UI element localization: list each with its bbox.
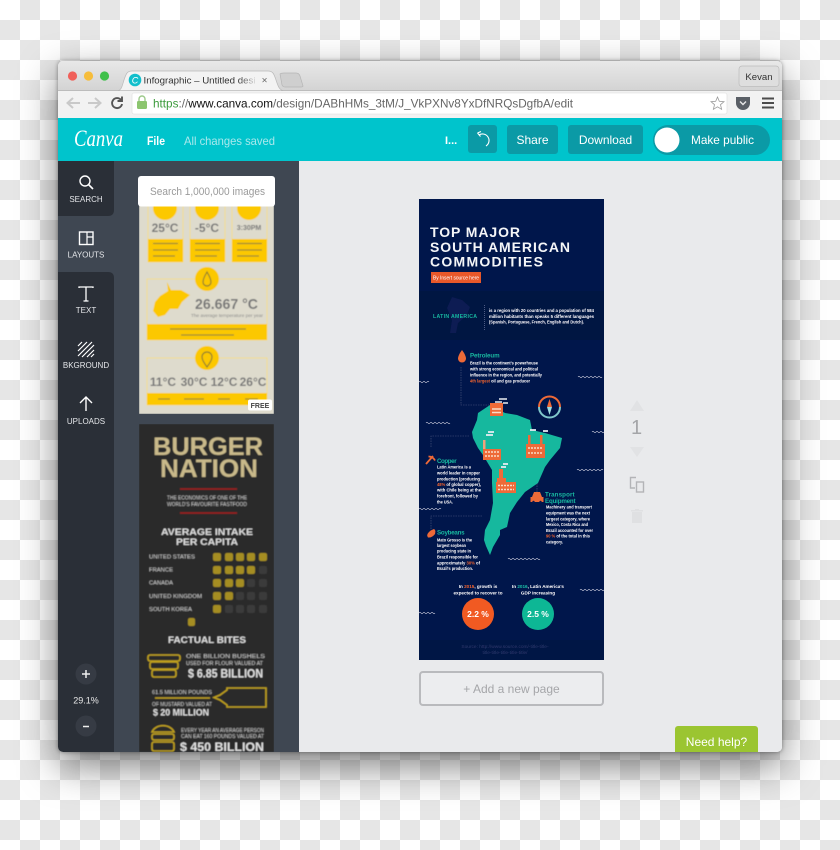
reload icon [112, 96, 122, 108]
text tab [76, 287, 96, 315]
make public toggle [653, 125, 770, 155]
move down [630, 447, 644, 457]
help button: Need help? [686, 735, 748, 749]
section: transport equipment: equipment was the next [546, 510, 590, 515]
search field [138, 176, 275, 206]
factory: north [490, 399, 508, 416]
browser tab: Infographic – Untitled desi [144, 76, 256, 86]
stat: 2016 gdp: GDP increasing [521, 590, 555, 596]
intake chart: FRANCE [149, 568, 174, 574]
latin america band [419, 291, 604, 340]
subtitle: WORLD'S FAVOURITE FASTFOOD [167, 502, 247, 508]
average intake heading: AVERAGE INTAKE [161, 527, 253, 538]
search field: Search 1,000,000 images [150, 186, 265, 198]
url text: https://www.canva.com/design/DABhHMs_3tM/J_VkPXNv8YxDfNRQsDgfbA/edit [153, 96, 574, 110]
section: transport equipment: Mexico, Costa Rica and [546, 522, 588, 527]
section: transport equipment: Transport [545, 492, 575, 498]
section: petroleum: with strong economical and political [469, 366, 538, 371]
section: copper: 48% of global copper), [437, 482, 481, 487]
download button: Download [579, 133, 632, 147]
temperature summary: 26.667 °C [195, 296, 258, 313]
section: petroleum: Brazil is the continent's powerhouse [470, 360, 538, 365]
main title: TOP MAJOR [430, 224, 520, 240]
forecast cards: 25°C [152, 221, 179, 235]
temperature summary [147, 267, 267, 340]
latin america intro: million habitants than speaks 5 different languages [489, 314, 594, 319]
zoom in button [76, 664, 96, 684]
star icon [711, 97, 724, 109]
average intake heading [161, 527, 253, 548]
back arrow [68, 98, 80, 108]
fact: mustard: OF MUSTARD VALUED AT [152, 702, 212, 708]
icon: car [530, 492, 544, 503]
burger title [153, 433, 263, 483]
intake chart [149, 553, 267, 626]
main title: SOUTH AMERICAN [430, 239, 570, 255]
city temperatures: 26°C [240, 375, 267, 389]
infographic page [419, 199, 604, 660]
user button: Kevan [745, 72, 773, 83]
icon: oil drop [458, 350, 466, 362]
subtitle: THE ECONOMICS OF ONE OF THE [167, 496, 248, 502]
factory: west [483, 432, 501, 460]
south america map [472, 405, 562, 555]
layouts tab: LAYOUTS [68, 250, 104, 260]
section: petroleum [458, 350, 542, 383]
section: transport equipment: Brazil accounted for over [546, 528, 593, 533]
share button: Share [516, 133, 549, 147]
stat: 2015 growth: expected to recover to [453, 590, 503, 596]
browser window screenshot [58, 61, 782, 752]
section: soybeans: Brazil's production. [437, 566, 473, 571]
page background [419, 199, 604, 660]
search tab [69, 176, 103, 204]
canva toolbar [58, 118, 782, 161]
intake chart: SOUTH KOREA [149, 607, 193, 613]
canva logo: Canva [74, 126, 123, 151]
layouts tab [68, 232, 104, 260]
section: copper: the USA. [437, 499, 453, 504]
make public toggle: Make public [691, 133, 754, 147]
address bar [58, 91, 782, 118]
source badge [431, 272, 481, 283]
move up [630, 400, 644, 411]
icon: pickaxe [426, 456, 435, 464]
source note: Source: http://www.source.com/-title-title- [461, 644, 549, 650]
pocket icon [736, 97, 750, 110]
section: transport equipment: Machinery and transport [546, 505, 592, 510]
share button [507, 125, 558, 154]
section: copper: Copper [437, 458, 457, 465]
title truncated: I... [445, 135, 457, 147]
section: transport equipment: largest category, where [546, 516, 590, 521]
section: transport equipment: Equipment [545, 498, 576, 505]
burger title: BURGER [153, 433, 263, 461]
city temperatures: 30°C [181, 375, 208, 389]
fact: burgers: CAN EAT 160 POUNDS VALUED AT [181, 734, 264, 740]
delete icon [631, 509, 643, 523]
section: soybeans [427, 529, 480, 571]
section: copper: world leader in copper [436, 470, 480, 475]
url field [132, 93, 727, 114]
fact: burgers: EVERY YEAR AN AVERAGE PERSON [181, 728, 264, 734]
page number: 1 [631, 417, 642, 439]
save status: All changes saved [184, 134, 275, 148]
stat: 2016 gdp: 2.5 % [527, 609, 549, 619]
average intake heading: PER CAPITA [176, 537, 238, 548]
section: copper: forefront, followed by [437, 494, 478, 499]
stat: 2016 gdp: In 2016, Latin America's [512, 584, 564, 589]
uploads tab: UPLOADS [67, 417, 105, 426]
fact: flour: $ 6.85 BILLION [188, 666, 263, 680]
section: soybeans: Brazil responsible for [437, 554, 478, 559]
section: copper: with Chile being at the [436, 488, 481, 493]
fact: mustard: $ 20 MILLION [153, 708, 209, 718]
stat: 2015 growth: In 2015, growth is [459, 584, 498, 589]
undo button [468, 125, 497, 153]
file menu: File [147, 134, 165, 148]
latin america intro: is a region with 20 countries and a population of 584 [489, 308, 594, 313]
browser tab: × [262, 76, 268, 86]
search tab: SEARCH [69, 195, 103, 204]
canvas background [58, 61, 782, 752]
section: petroleum: 4th largest oil and gas producer [470, 378, 530, 383]
section: soybeans: Soybeans [437, 530, 465, 536]
section: copper: Latin America is a [437, 464, 471, 469]
fact: mustard [152, 688, 266, 718]
free badge: FREE [251, 403, 270, 410]
intake chart: UNITED STATES [149, 554, 196, 560]
intake chart: CANADA [149, 580, 174, 586]
city temperatures: 12°C [211, 375, 238, 389]
free badge [248, 400, 272, 410]
background tab: BKGROUND [63, 361, 109, 370]
page controls [630, 400, 644, 523]
latin america intro [433, 297, 594, 333]
forecast cards: -5°C [195, 221, 219, 235]
subtitle [167, 489, 248, 513]
fact: flour: USED FOR FLOUR VALUED AT [186, 661, 263, 667]
browser tab [117, 71, 284, 91]
menu icon [762, 98, 774, 108]
intake chart: UNITED KINGDOM [149, 594, 202, 600]
section: copper [426, 456, 481, 504]
uploads tab [67, 397, 105, 426]
background tab [63, 342, 109, 370]
fact: burgers: $ 450 BILLION [180, 740, 264, 754]
layouts tab background [58, 210, 114, 278]
section: transport equipment: 90 % of the total in this [546, 534, 590, 539]
zoom out button [76, 716, 96, 736]
window control dots [68, 71, 109, 81]
section: soybeans: Mato Grosso is the [437, 537, 472, 542]
temperature summary: The average temperature per year [191, 313, 264, 318]
stat: 2015 growth [453, 584, 503, 630]
latin america intro: (Spanish, Portuguese, French, English and Dutch). [489, 320, 584, 324]
fact: burgers [152, 726, 264, 754]
template: weather [139, 196, 274, 414]
source badge: By Insert source here [433, 276, 479, 282]
city temperatures: 11°C [150, 375, 176, 389]
city temperatures [147, 346, 267, 405]
new tab button [280, 73, 303, 87]
section: soybeans: approximately 30% of [437, 560, 480, 565]
text tab: TEXT [76, 306, 96, 315]
compass [539, 396, 560, 418]
factory: south [496, 464, 516, 493]
section: petroleum: Petroleum [470, 352, 500, 360]
factory: east [526, 430, 548, 458]
download button [568, 125, 643, 154]
wave decorations [419, 376, 604, 614]
help button [675, 726, 758, 760]
add page button [420, 672, 603, 705]
burger title: NATION [160, 455, 258, 483]
fact: flour [148, 654, 266, 680]
stat: 2016 gdp [512, 584, 564, 630]
browser tab: C [132, 76, 139, 86]
leader lines [431, 367, 537, 529]
forward arrow [88, 98, 100, 108]
stat: 2015 growth: 2.2 % [467, 609, 489, 619]
forecast cards [147, 206, 268, 263]
fact: flour: ONE BILLION BUSHELS [186, 654, 266, 660]
latin america intro: LATIN AMERICA [433, 314, 477, 320]
source note [461, 644, 549, 656]
browser title bar [58, 66, 782, 90]
user button [739, 66, 779, 86]
section: soybeans: largest soybean [437, 543, 466, 548]
section: transport equipment [530, 492, 593, 545]
fact: mustard: 61.5 MILLION POUNDS [152, 690, 213, 696]
main title: COMMODITIES [430, 254, 543, 270]
section: transport equipment: category. [546, 540, 563, 545]
forecast cards: 3:30PM [237, 225, 261, 232]
source note: title-title-title-title-title/ [482, 650, 528, 656]
factual bites heading: FACTUAL BITES [168, 635, 246, 646]
duplicate icon [630, 478, 644, 492]
icon: soybean [427, 529, 435, 538]
main title [430, 224, 570, 270]
lock icon [137, 96, 147, 109]
window shadow [58, 61, 782, 752]
left navigation [58, 161, 114, 752]
footer band [419, 640, 604, 660]
section: copper: production (producing [437, 476, 480, 481]
add page button: + Add a new page [463, 682, 560, 696]
section: soybeans: producing state in [437, 549, 471, 554]
template panel [114, 161, 299, 754]
zoom percentage: 29.1% [73, 696, 99, 706]
template: burger nation [139, 424, 274, 754]
section: petroleum: influence in the region, and potentially [470, 372, 542, 378]
